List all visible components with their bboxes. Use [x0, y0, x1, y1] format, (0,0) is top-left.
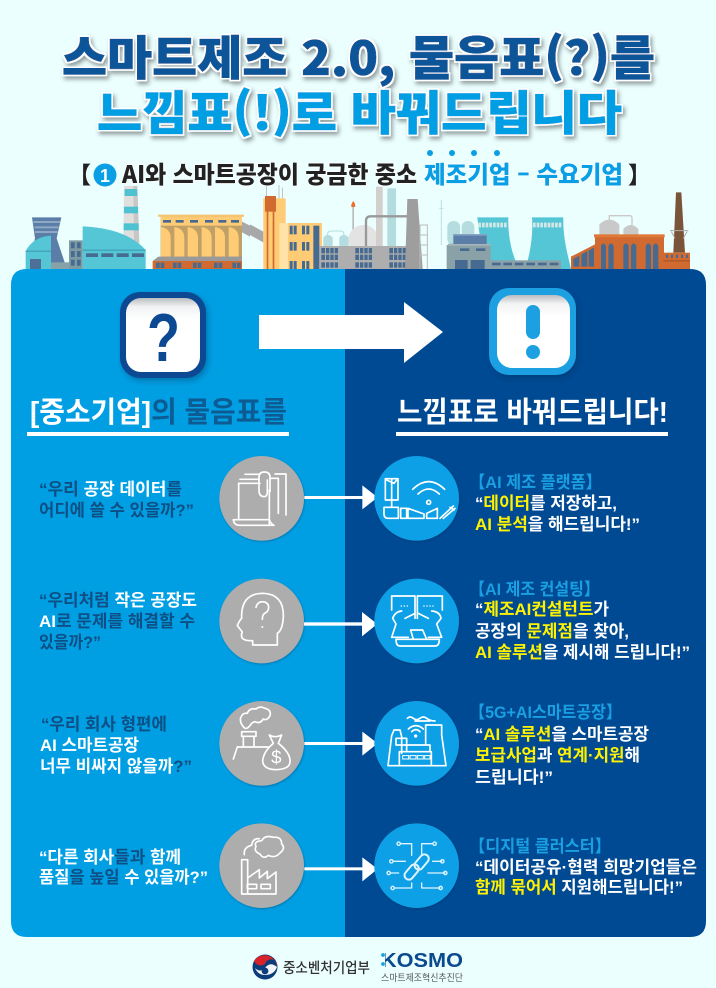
main panel: [11, 269, 706, 937]
question 1: [39, 480, 194, 520]
arrow: row 3: [304, 732, 378, 756]
question 3: [40, 715, 192, 776]
logo: KOSMO: KOSMO: [381, 950, 463, 972]
factory: refinery: [250, 185, 474, 269]
title: 느낌표(!)로 바꿔드립니다: [97, 75, 622, 144]
icon: smoke and money bag: $: [271, 746, 282, 767]
question 4: “다른 회사들과 함께: [39, 848, 181, 867]
question 2: 있을까?”: [39, 633, 101, 652]
panel: left side: [11, 269, 345, 937]
icon: documents with clip: [219, 456, 304, 541]
heading: right: 느낌표로 바꿔드립니다!: [397, 396, 668, 429]
answer 4: [469, 837, 697, 897]
answer 4: “데이터공유·협력 희망기업들은: [475, 858, 697, 877]
icon: chain link circuit: [374, 823, 459, 908]
answer 3: [469, 703, 649, 787]
icon: head with question: [219, 579, 304, 663]
answer 1: “데이터를 저장하고,: [475, 494, 617, 513]
title: 스마트제조 2.0, 물음표(?)를: [62, 20, 655, 89]
answer 1: [469, 473, 640, 534]
icon: question box: ?: [147, 300, 180, 376]
logo: KOSMO: [380, 950, 463, 984]
subtitle: 【: [68, 162, 91, 188]
logo: ministry emblem: [252, 954, 278, 980]
icon: smoke and money bag: [219, 701, 304, 786]
answer 1: AI 분석을 해드립니다!”: [475, 515, 640, 534]
heading: left: [중소기업]의 물음표를: [30, 396, 287, 429]
answer 3: 보급사업과 연계·지원해: [475, 746, 640, 765]
answer 2: “제조AI컨설턴트가: [475, 600, 609, 619]
question 1: 어디에 쓸 수 있을까?”: [39, 501, 194, 520]
text: ministry: 중소벤처기업부: [283, 960, 370, 977]
arrow: row 1: [304, 485, 378, 509]
footer logos: [252, 950, 463, 984]
icon: question box: [120, 292, 206, 378]
question 4: [39, 848, 208, 887]
arrow: row 2: [304, 612, 377, 636]
question 3: AI 스마트공장: [40, 736, 139, 755]
question 4: 품질을 높일 수 있을까?”: [39, 868, 208, 887]
answer 2: 공장의 문제점을 찾아,: [475, 622, 629, 641]
subtitle: [68, 150, 651, 190]
answer 2: [469, 580, 690, 662]
title: [62, 20, 655, 144]
subtitle: 】: [628, 162, 651, 188]
factory: silo: [153, 215, 250, 269]
icon: factory with smoke: [219, 823, 304, 908]
question 1: “우리 공장 데이터를: [39, 480, 182, 499]
answer 2: AI 솔루션을 제시해 드립니다!”: [475, 643, 690, 662]
subtitle: AI와 스마트공장이 궁금한 중소: [121, 155, 417, 190]
logo: KOSMO: 스마트제조혁신추진단: [381, 973, 463, 984]
subtitle: 제조기업 – 수요기업: [424, 155, 623, 190]
question 2: AI로 문제를 해결할 수: [39, 612, 195, 631]
icon: exclamation box: [489, 288, 576, 375]
arrow: big: [259, 302, 443, 363]
icon: consulting: [374, 579, 459, 663]
factory skyline: [26, 185, 690, 269]
icon: smart factory: [374, 701, 459, 786]
answer 4: 함께 묶어서 지원해드립니다!”: [475, 878, 683, 897]
question 2: [39, 591, 197, 652]
question 3: “우리 회사 형편에: [41, 715, 167, 734]
question 3: 너무 비싸지 않을까?”: [40, 757, 192, 776]
answer 4: 【디지털 클러스터】: [469, 837, 611, 856]
subtitle: 1: [100, 166, 110, 186]
panel: right side: [345, 269, 706, 937]
answer 2: 【AI 제조 컨설팅】: [469, 580, 600, 599]
icon: AI platform: [374, 456, 459, 541]
answer 3: 드립니다!”: [475, 768, 553, 787]
answer 3: 【5G+AI스마트공장】: [469, 703, 622, 722]
answer 1: 【AI 제조 플랫폼】: [469, 473, 602, 492]
question 2: “우리처럼 작은 공장도: [39, 591, 197, 610]
arrow: row 4: [304, 857, 378, 881]
factory: power plant: [26, 186, 146, 269]
answer 3: “AI 솔루션을 스마트공장: [475, 725, 649, 744]
factory: cooling towers: [447, 192, 690, 269]
